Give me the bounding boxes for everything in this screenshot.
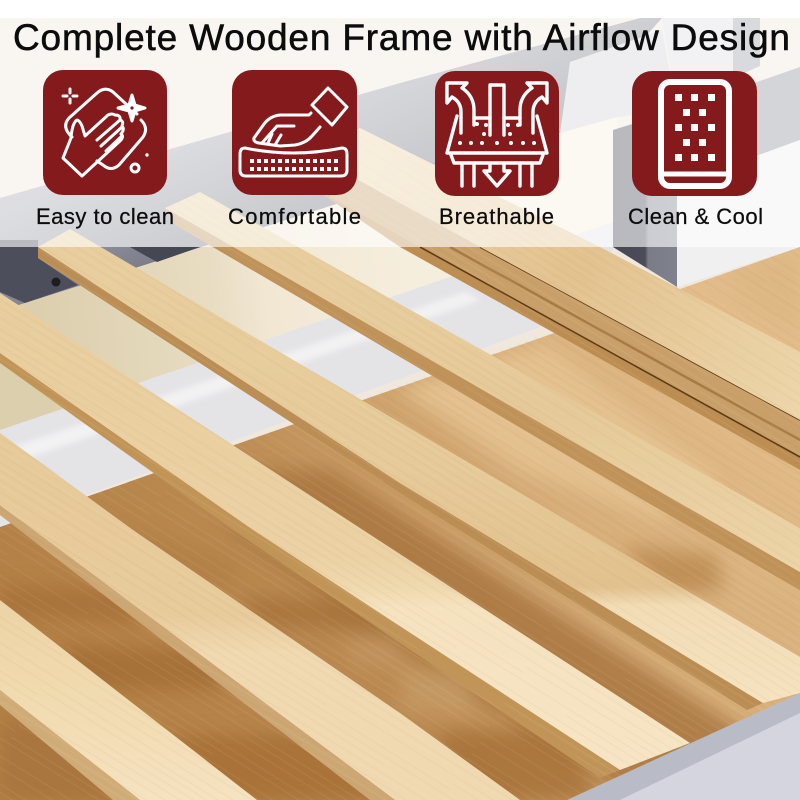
- bolt: [52, 278, 60, 286]
- gray panel right: [677, 67, 800, 185]
- headboard panels: [560, 30, 677, 133]
- icon: airflow through mattress: [435, 71, 559, 196]
- white furniture front: [677, 140, 800, 287]
- headboard leg: [613, 110, 677, 287]
- label: breathable: Breathable: [439, 204, 554, 229]
- mattress pores: [250, 159, 338, 171]
- feature: easy to clean: [36, 70, 174, 229]
- title: Complete Wooden Frame with Airflow Design: [13, 17, 790, 58]
- feature: breathable: [435, 71, 559, 229]
- label: comfortable: Comfortable: [228, 204, 361, 229]
- cream wall under bed: [0, 117, 617, 435]
- slat: third from back: [38, 229, 800, 710]
- air dots: [458, 122, 536, 145]
- icon: mattress top view: [632, 71, 757, 196]
- label: clean and cool: Clean & Cool: [628, 204, 763, 229]
- translucent header band: [0, 18, 800, 247]
- floor: [0, 247, 800, 800]
- metal front rail: [567, 693, 800, 800]
- icon: hand wiping cloth: [43, 70, 167, 195]
- bed side rail: [0, 18, 662, 311]
- baseboard highlight: [0, 292, 480, 468]
- feature: clean and cool: [628, 71, 763, 229]
- slat: second from back: [165, 192, 800, 590]
- gray post: [733, 18, 760, 78]
- rear stacked slats: [316, 128, 800, 470]
- slat: front: [0, 600, 257, 800]
- top white strip: [0, 0, 800, 18]
- label: easy to clean: Easy to clean: [36, 204, 174, 229]
- feature: comfortable: [228, 70, 361, 229]
- slat: fourth from back: [0, 293, 690, 778]
- slat: fifth from back: [0, 433, 520, 800]
- frame dark gap: [130, 247, 200, 262]
- dark frame bracket: [0, 240, 78, 303]
- mattress perforations: [675, 94, 715, 161]
- white furniture upper: [662, 18, 733, 110]
- icon: hand pressing mattress: [232, 70, 357, 195]
- white baseboard: [0, 222, 613, 527]
- wood grain texture: [0, 247, 800, 800]
